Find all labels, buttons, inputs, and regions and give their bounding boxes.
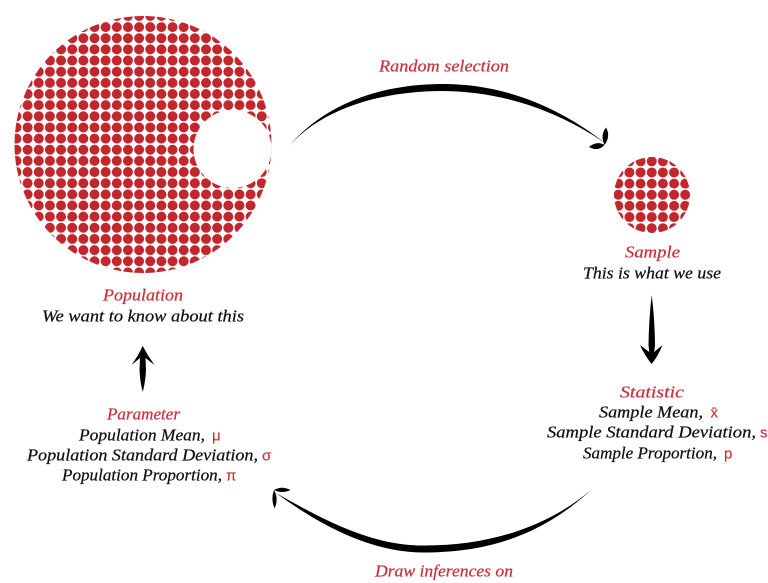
- sample proportion: p: [724, 446, 732, 462]
- arrow: population to sample: [289, 84, 608, 149]
- arrow: sample to statistic: [640, 295, 662, 364]
- arrow: statistic to parameter: [272, 488, 591, 552]
- description: sample: This is what we use: [583, 264, 721, 282]
- sample cut-out in population: [194, 110, 272, 188]
- sample mean: x̄: [710, 404, 718, 422]
- sample circle: [618, 161, 690, 228]
- population standard deviation: Population Standard Deviation,: [26, 446, 258, 464]
- population mean: μ: [212, 428, 221, 444]
- sample proportion: Sample Proportion,: [583, 444, 717, 462]
- population circle: [16, 16, 275, 272]
- sample standard deviation: Sample Standard Deviation,: [547, 422, 756, 442]
- text block: parameter: [26, 404, 272, 484]
- label: random selection: Random selection: [378, 56, 509, 76]
- heading: parameter: Parameter: [106, 404, 180, 424]
- heading: sample: Sample: [625, 242, 680, 262]
- heading: population: Population: [102, 286, 183, 304]
- population standard deviation: σ: [262, 448, 272, 464]
- arrow: parameter to population: [132, 346, 154, 392]
- label: draw inferences on: Draw inferences on: [374, 562, 513, 580]
- text block: population: [42, 286, 244, 326]
- text block: sample: [583, 242, 721, 282]
- description: population: We want to know about this: [42, 306, 244, 326]
- text block: statistic: [547, 382, 768, 462]
- heading: statistic: Statistic: [620, 382, 685, 402]
- population proportion: Population Proportion,: [61, 466, 222, 484]
- population mean: Population Mean,: [78, 426, 205, 444]
- sample mean: Sample Mean,: [599, 402, 703, 422]
- population proportion: π: [226, 468, 236, 484]
- sample standard deviation: s: [760, 424, 768, 442]
